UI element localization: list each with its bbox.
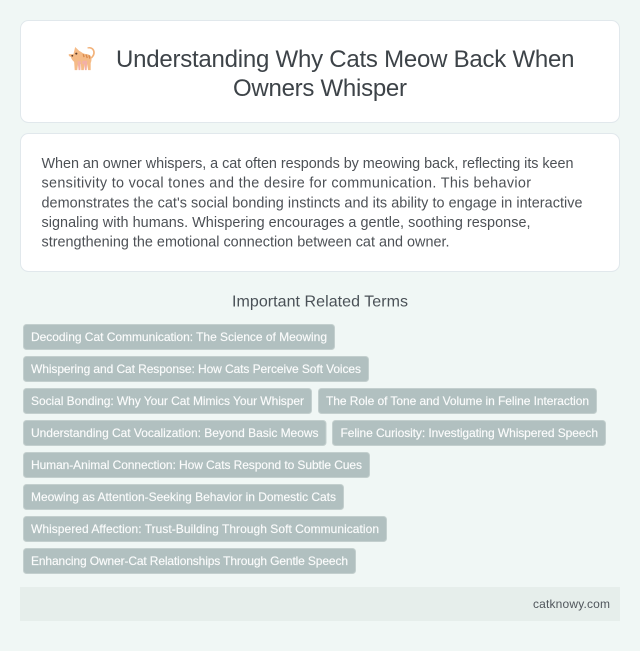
tag: Meowing as Attention-Seeking Behavior in Domestic Cats	[31, 490, 336, 504]
tag	[24, 516, 386, 542]
tag	[24, 420, 326, 446]
tag	[318, 388, 596, 414]
icon: cat	[69, 47, 95, 70]
panel: description	[20, 134, 620, 272]
panel: title	[20, 20, 620, 122]
description text: signaling with humans. Whispering encourages a gentle, soothing response,	[42, 215, 530, 231]
tag: The Role of Tone and Volume in Feline Interaction	[326, 394, 589, 408]
description text: demonstrates the cat's social bonding instincts and its ability to engage in interactive	[42, 196, 582, 212]
tag: Social Bonding: Why Your Cat Mimics Your Whisper	[31, 394, 304, 408]
heading: related terms: Important Related Terms	[232, 294, 408, 310]
tag: Whispering and Cat Response: How Cats Perceive Soft Voices	[31, 362, 361, 376]
tag	[24, 324, 334, 350]
description text: strengthening the emotional connection between cat and owner.	[42, 234, 450, 250]
description text: When an owner whispers, a cat often responds by meowing back, reflecting its keen	[42, 156, 574, 172]
tag	[332, 420, 606, 446]
tag: Whispered Affection: Trust-Building Through Soft Communication	[31, 522, 379, 536]
tag: Feline Curiosity: Investigating Whispered Speech	[340, 426, 598, 440]
panel: related term tags	[24, 324, 606, 574]
title text: Understanding Why Cats Meow Back When	[116, 46, 574, 73]
tag	[24, 452, 370, 478]
tag: Understanding Cat Vocalization: Beyond Basic Meows	[31, 426, 318, 440]
footer	[20, 587, 620, 621]
tag	[24, 548, 356, 574]
footer: catknowy.com	[533, 597, 610, 611]
tag	[24, 356, 368, 382]
tag: Decoding Cat Communication: The Science of Meowing	[31, 330, 327, 344]
tag	[24, 484, 344, 510]
description text	[42, 156, 582, 250]
title text	[116, 46, 574, 102]
tag: Human-Animal Connection: How Cats Respond to Subtle Cues	[31, 458, 362, 472]
title text: Owners Whisper	[233, 75, 407, 102]
tag	[24, 388, 312, 414]
description text: sensitivity to vocal tones and the desire for communication. This behavior	[42, 176, 531, 192]
tag: Enhancing Owner-Cat Relationships Through Gentle Speech	[31, 554, 348, 568]
